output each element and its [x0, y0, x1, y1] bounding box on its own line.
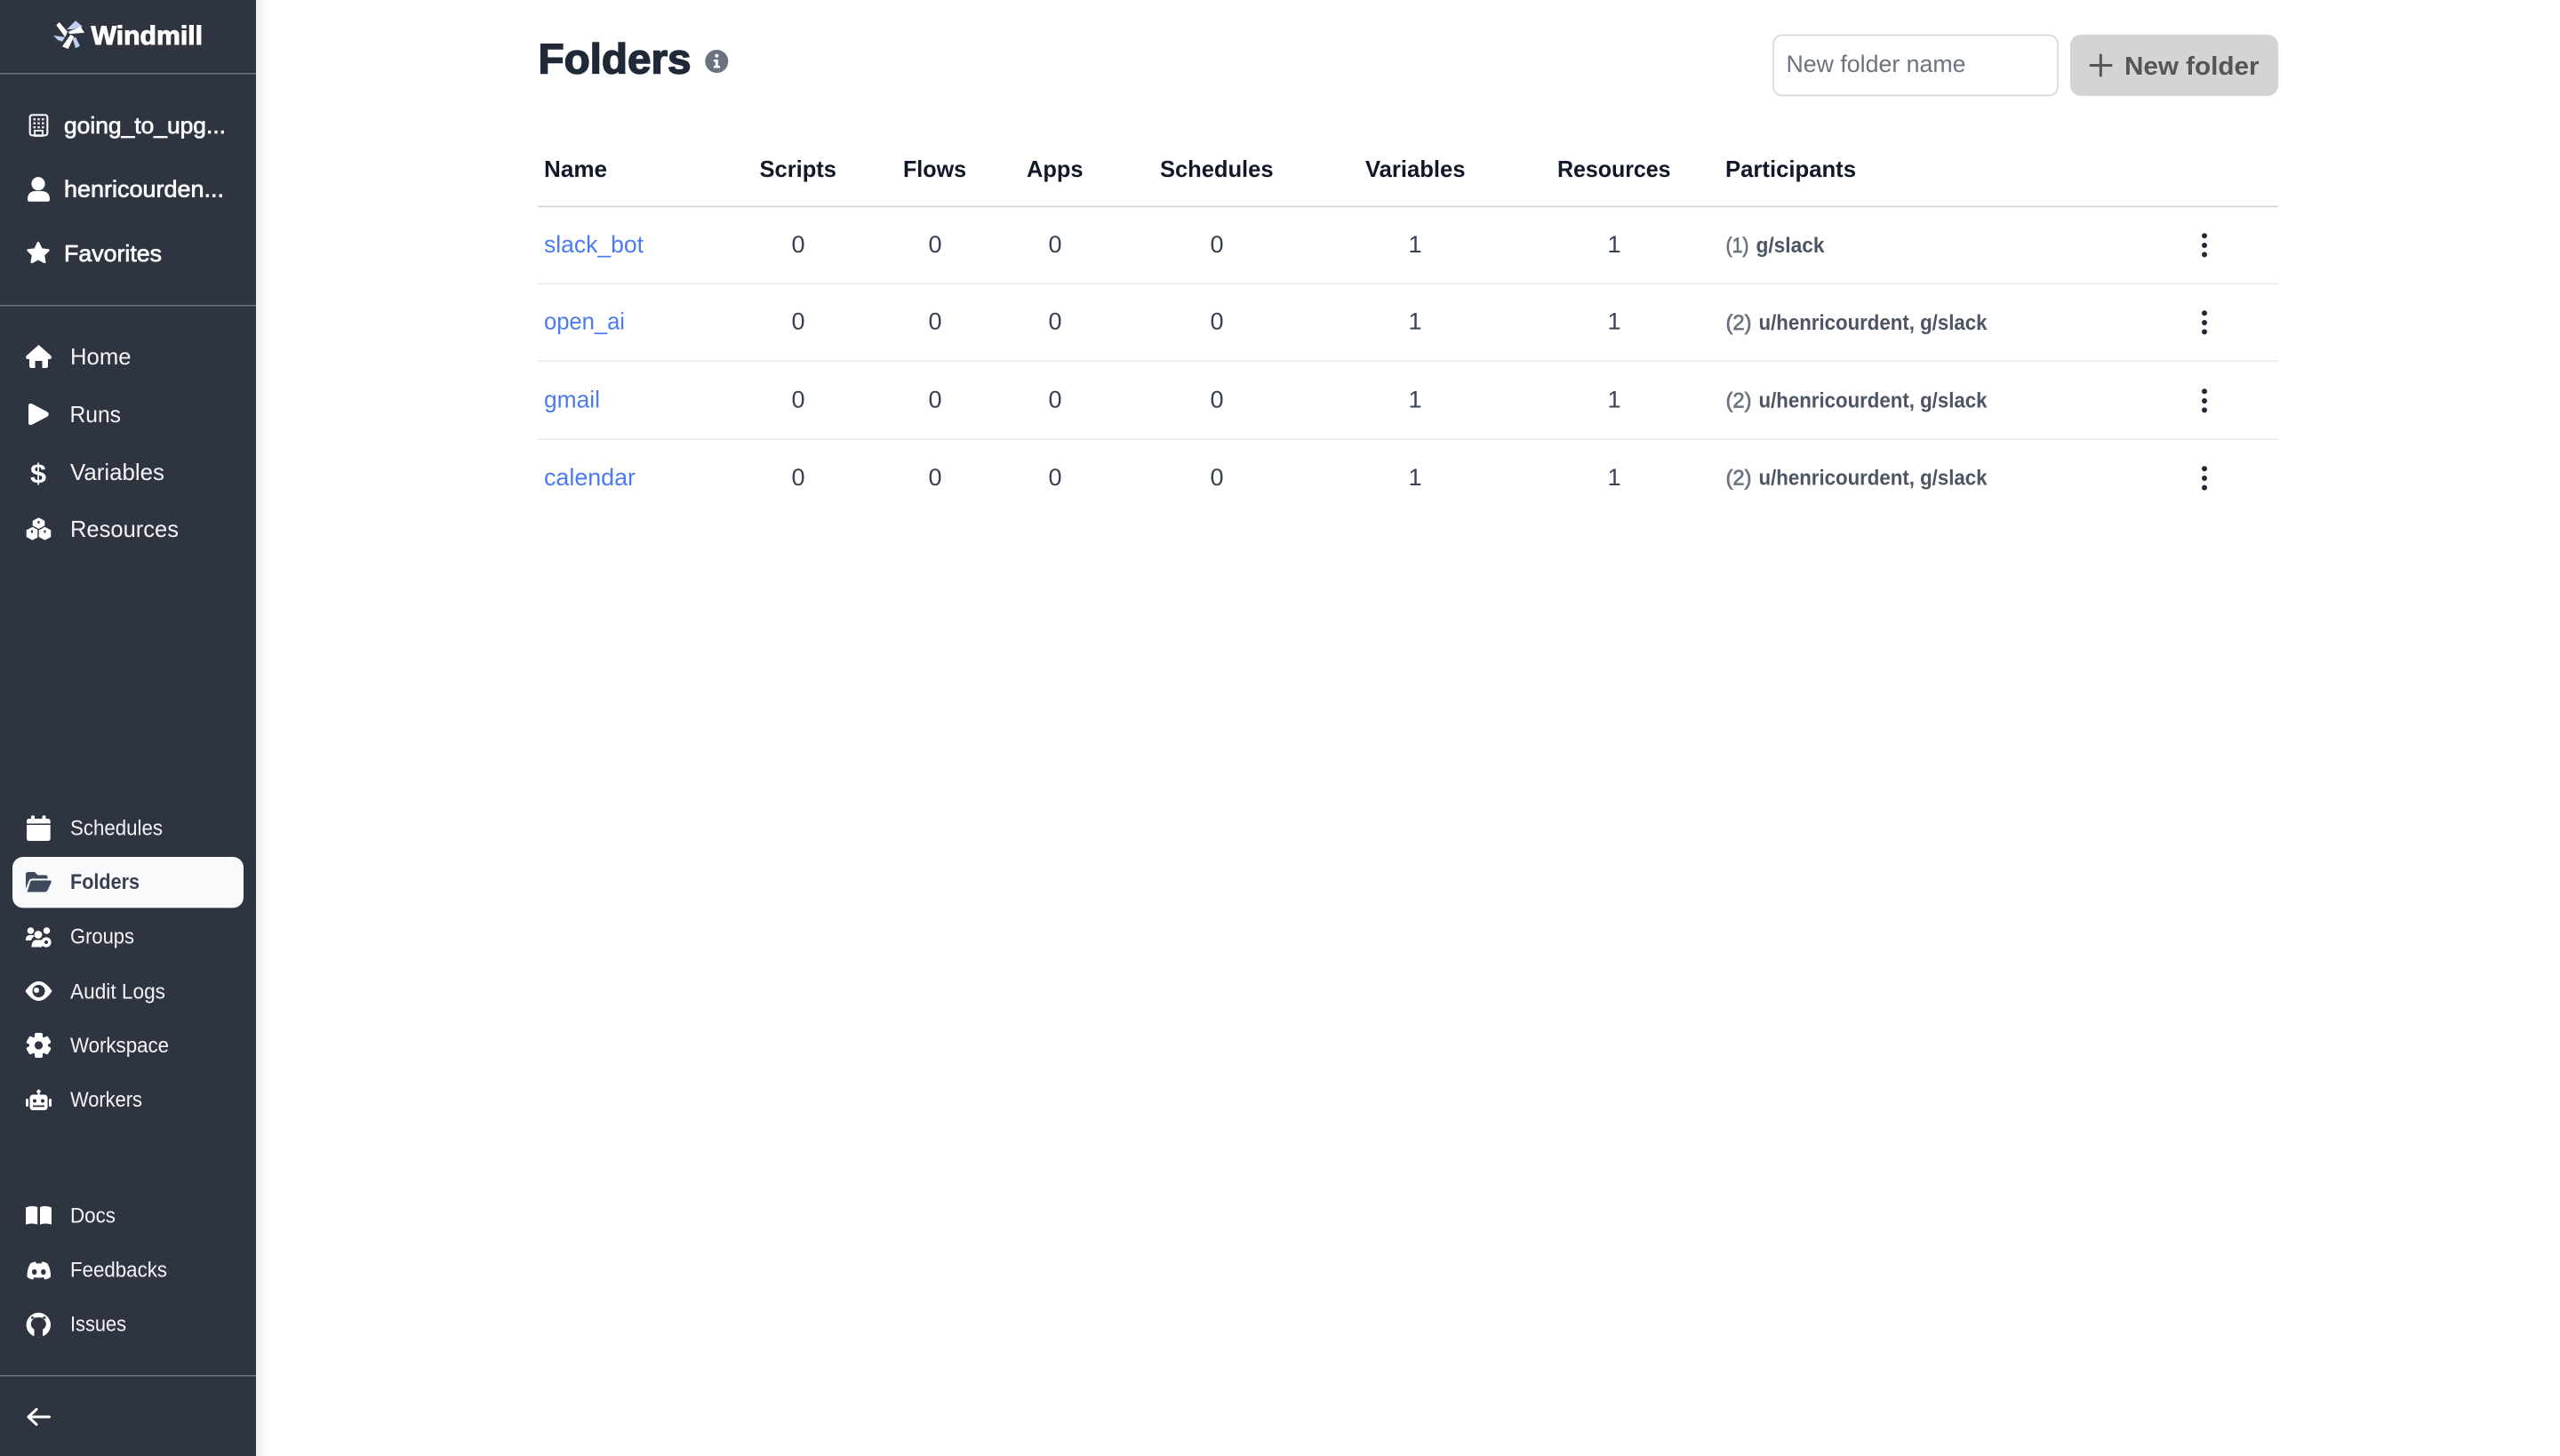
button: new folder: [2070, 35, 2278, 96]
row: calendar: 1: [1408, 464, 1422, 491]
nav item: Feedbacks: Feedbacks: [70, 1259, 167, 1282]
nav item: Resources: Resources: [70, 516, 179, 542]
nav item: Docs: Docs: [70, 1204, 116, 1228]
row: open_ai: (2): [1726, 311, 1751, 335]
row: slack_bot: [544, 231, 2207, 258]
logo: Windmill: Windmill: [91, 21, 203, 51]
nav item: Variables: $: [30, 458, 46, 489]
row: gmail: (2): [1726, 389, 1751, 412]
row: calendar: (2): [1726, 467, 1751, 491]
nav item: Folders (active): Folders: [70, 870, 140, 894]
nav item: Audit Logs: Audit Logs: [70, 980, 165, 1004]
table header: Participants: [1725, 156, 1856, 182]
table header: Name: [544, 156, 607, 182]
row: open_ai: 0: [928, 308, 942, 335]
nav item: Docs: [26, 1204, 116, 1228]
icon: collapse arrow: [28, 1410, 50, 1424]
row: gmail: 0: [928, 387, 942, 413]
row: open_ai: 0: [1049, 308, 1062, 335]
input: new folder name: [1773, 36, 2058, 96]
row: slack_bot: g/slack: [1756, 234, 1825, 258]
workspace menu item: going_to_upg...: [64, 112, 226, 139]
row: open_ai: open_ai: [544, 308, 625, 335]
nav item: Runs: Runs: [69, 401, 121, 428]
table header: Variables: [1365, 156, 1465, 182]
row: calendar: [544, 464, 2207, 491]
row: slack_bot: 1: [1408, 231, 1422, 258]
nav item: Groups: Groups: [70, 924, 134, 948]
row: calendar: 1: [1607, 464, 1621, 491]
user menu item: henricourden...: [64, 176, 224, 203]
row: gmail: gmail: [544, 387, 600, 413]
row: calendar: calendar: [544, 464, 636, 491]
row: slack_bot: (1): [1726, 234, 1749, 258]
row: open_ai: 0: [1211, 308, 1224, 335]
nav item: Variables: Variables: [70, 459, 164, 485]
row: gmail: [544, 387, 2207, 413]
row: gmail: u/henricourdent, g/slack: [1758, 389, 1988, 412]
nav item: Groups: [26, 924, 134, 948]
page title: Folders: [539, 36, 692, 83]
icon: info: [705, 50, 728, 73]
table header: [544, 156, 1856, 182]
row: gmail: 1: [1408, 387, 1422, 413]
row: gmail: 0: [1211, 387, 1224, 413]
nav item: Issues: Issues: [70, 1313, 126, 1337]
nav item: Workers: Workers: [70, 1088, 142, 1112]
nav item: Issues: [27, 1313, 126, 1337]
table header: Resources: [1557, 156, 1671, 182]
row: gmail: 0: [791, 387, 805, 413]
table header: Flows: [903, 156, 966, 182]
row: open_ai: u/henricourdent, g/slack: [1758, 311, 1988, 335]
row: slack_bot: slack_bot: [544, 231, 644, 258]
nav item: Feedbacks: [27, 1259, 167, 1282]
row: slack_bot: 0: [791, 231, 805, 258]
row: calendar: 0: [1049, 464, 1062, 491]
nav item: Home: Home: [70, 343, 132, 370]
row: slack_bot: 0: [928, 231, 942, 258]
row: slack_bot: 0: [1211, 231, 1224, 258]
row: open_ai: 1: [1408, 308, 1422, 335]
row: slack_bot: 1: [1607, 231, 1621, 258]
row: open_ai: 0: [791, 308, 805, 335]
nav item: Runs: [28, 401, 121, 428]
input: new folder name: New folder name: [1787, 51, 1966, 77]
nav item: Schedules: Schedules: [70, 816, 163, 841]
nav item: Schedules: [27, 815, 163, 841]
row: calendar: u/henricourdent, g/slack: [1758, 467, 1988, 491]
table header: Schedules: [1160, 156, 1273, 182]
nav item: Home: [26, 343, 132, 370]
row: gmail: 1: [1607, 387, 1621, 413]
row: open_ai: 1: [1607, 308, 1621, 335]
nav item: Workspace: Workspace: [70, 1034, 169, 1058]
button: new folder: New folder: [2124, 52, 2260, 81]
table header: Scripts: [759, 156, 836, 182]
nav item: Workers: [26, 1088, 142, 1112]
table header: Apps: [1027, 156, 1083, 182]
nav item: Audit Logs: [26, 980, 165, 1004]
nav item: Folders (active): [12, 857, 244, 908]
nav item: Workspace: [26, 1033, 169, 1058]
favorites menu item: Favorites: [64, 240, 162, 267]
row: open_ai: [544, 308, 2207, 335]
nav item: Variables: [30, 458, 164, 489]
panel: sidebar: [0, 0, 256, 1456]
row: gmail: 0: [1049, 387, 1062, 413]
row: calendar: 0: [791, 464, 805, 491]
table: folders: [538, 156, 2278, 491]
row: calendar: 0: [1211, 464, 1224, 491]
row: calendar: 0: [928, 464, 942, 491]
row: slack_bot: 0: [1049, 231, 1062, 258]
